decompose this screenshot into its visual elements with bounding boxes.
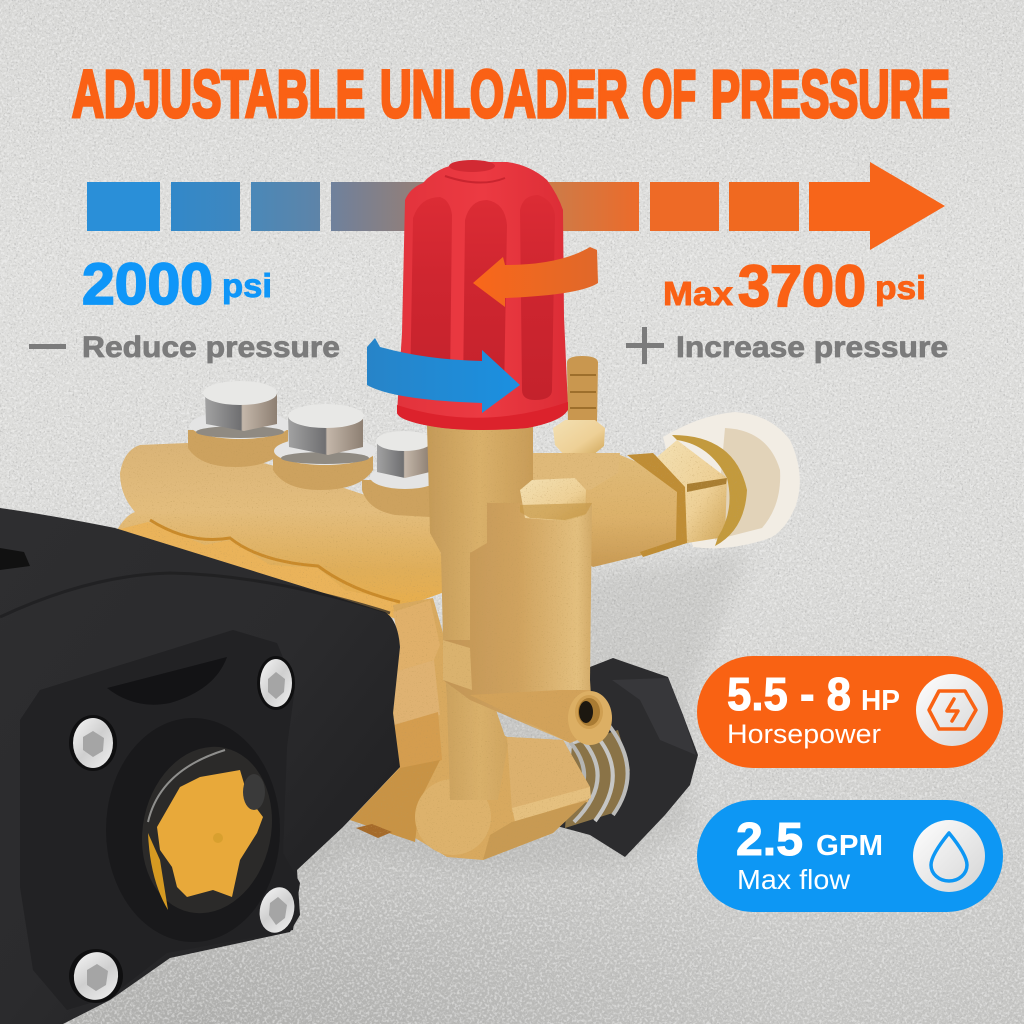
- max flow pill: [697, 800, 1003, 912]
- orange rotation arrow: [473, 247, 598, 307]
- pressure scale arrow bar: [87, 162, 945, 250]
- blue rotation arrow: [367, 338, 520, 413]
- bolts: [69, 656, 299, 1005]
- max flow pill: Max flow: [737, 864, 851, 895]
- icon: water drop: [913, 820, 985, 892]
- boss 3: [362, 480, 430, 517]
- icon: hexagon lightning bolt: [916, 674, 988, 746]
- high pressure value: [663, 254, 926, 319]
- low pressure value: psi: [222, 267, 272, 304]
- high pressure value: Max: [663, 275, 734, 312]
- horsepower pill: Horsepower: [727, 719, 881, 749]
- hose barb fitting: [553, 356, 605, 459]
- increase pressure label: Increase pressure: [676, 331, 948, 364]
- title: UNLOADER: [380, 57, 628, 132]
- horsepower pill: [697, 656, 1003, 768]
- title: ADJUSTABLE: [72, 57, 365, 132]
- max flow pill: GPM: [816, 830, 883, 862]
- soft shadow on wall: [300, 550, 750, 880]
- black adjustment knob: [553, 658, 698, 857]
- black pump housing: [0, 508, 400, 1024]
- outlet boss with threaded hole: [568, 691, 612, 745]
- title: [72, 57, 950, 132]
- max flow pill: 2.5: [736, 813, 803, 865]
- brass lower body: [350, 598, 591, 860]
- outlet pipe and nuts: [580, 435, 747, 567]
- low pressure value: 2000: [82, 252, 213, 317]
- hex plugs: [190, 381, 440, 489]
- high pressure value: psi: [875, 269, 926, 306]
- red adjustment cap: [397, 160, 568, 430]
- horsepower pill: HP: [861, 685, 900, 717]
- title: OF: [642, 57, 696, 132]
- spring: [556, 723, 630, 828]
- sight glass: [106, 718, 287, 942]
- boss 1: [188, 430, 288, 467]
- boss 2: [273, 455, 373, 490]
- brass manifold with plug bosses: [117, 430, 450, 620]
- pressure washer pump: [0, 160, 800, 1024]
- high pressure value: 3700: [738, 254, 866, 319]
- reduce pressure label: Reduce pressure: [82, 331, 340, 364]
- white outlet cap: [663, 412, 800, 548]
- low pressure value: [82, 252, 272, 317]
- front mounting plate: [20, 630, 300, 1010]
- horsepower pill: 5.5 - 8: [727, 668, 851, 720]
- vertical valve stem and block: [427, 425, 620, 800]
